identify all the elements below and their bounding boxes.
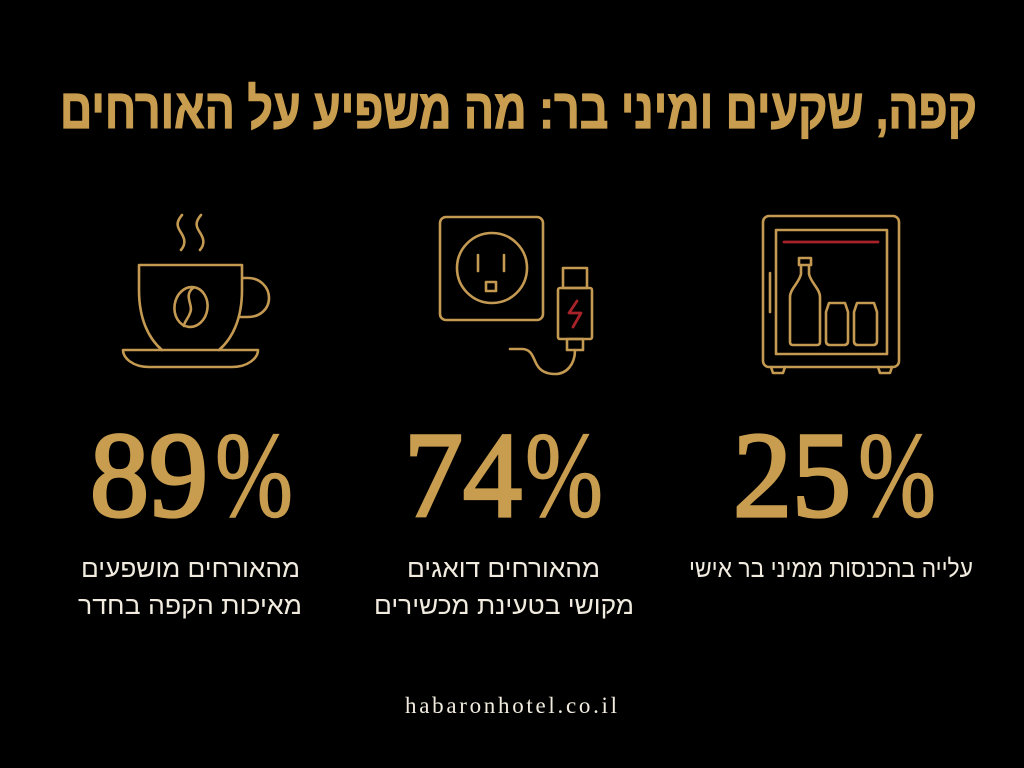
label: coffee: מאיכות הקפה בחדר (78, 592, 302, 620)
label: charging: מהאורחים דואגים (407, 555, 600, 583)
stat: 25%: 25 (733, 408, 851, 543)
stat: 74%: % (525, 408, 603, 543)
icon: mini bar fridge (763, 216, 899, 373)
stat: 74% (404, 408, 603, 543)
stat: 89% (90, 408, 293, 543)
stat: 25% (733, 408, 936, 543)
stat: 89%: % (215, 408, 293, 543)
stat: 74%: 74 (404, 408, 522, 543)
label: mini bar: עלייה בהכנסות ממיני בר אישי (689, 555, 973, 583)
label: charging (374, 555, 634, 620)
stat: 89%: 89 (90, 408, 208, 543)
label: coffee (78, 555, 302, 620)
label: coffee: מהאורחים מושפעים (81, 555, 300, 583)
icon: wall socket and charger (440, 217, 592, 374)
label: charging: מקושי בטעינת מכשירים (374, 592, 634, 620)
icon: coffee cup (123, 215, 269, 367)
footer website: habaronhotel.co.il (405, 693, 617, 718)
stat: 25%: % (858, 408, 936, 543)
